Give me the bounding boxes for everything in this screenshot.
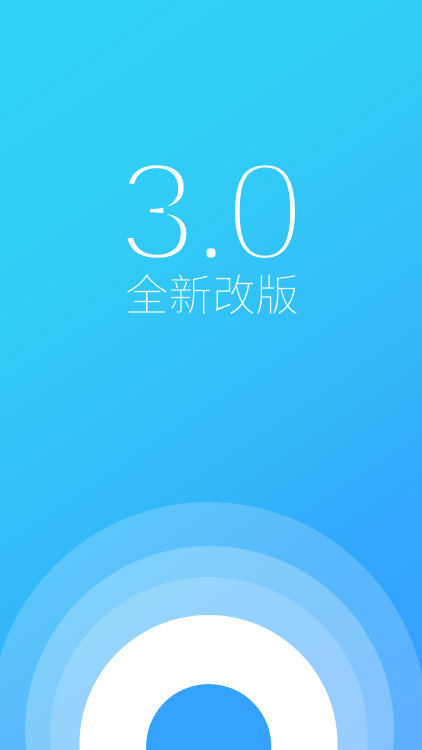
- version number: [118, 132, 304, 292]
- concentric rings: [0, 502, 422, 750]
- ring: white: [79, 615, 337, 750]
- version number: .: [207, 229, 215, 262]
- subtitle: 全新改版: [125, 273, 299, 321]
- ring: second: [25, 546, 394, 750]
- version number: 0: [226, 132, 304, 292]
- ring: third: [50, 577, 368, 750]
- center circle: [146, 684, 271, 750]
- ring: outer: [0, 502, 422, 750]
- version number: 3: [118, 132, 196, 290]
